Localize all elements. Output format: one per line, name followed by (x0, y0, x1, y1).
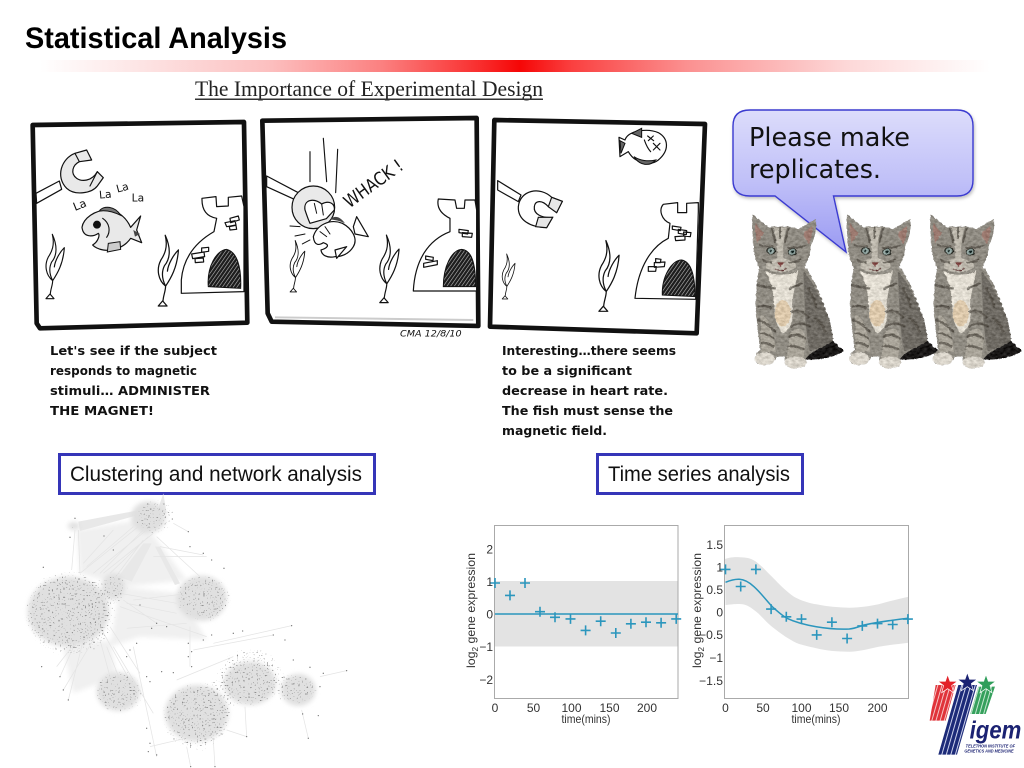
plot 1 y ticks: 2 (486, 542, 493, 556)
squashed fish (290, 217, 368, 258)
plot 1 x ticks: 200 (637, 701, 657, 715)
plot 1 mean line (495, 613, 678, 615)
singing text: La (71, 196, 88, 214)
caption left: THE MAGNET! (50, 403, 154, 418)
caption right: The fish must sense the (502, 403, 673, 418)
plot 1 y ticks: −1 (479, 640, 493, 654)
logo stars (938, 673, 996, 693)
signature: CMA 12/8/10 (400, 330, 462, 340)
fish (82, 207, 142, 252)
plot 1 y ticks (479, 542, 493, 687)
kitten 3 (930, 214, 1022, 368)
logo stripes (930, 685, 995, 755)
singing text: La (115, 180, 130, 196)
plot 1 y axis label: 2 (471, 646, 480, 652)
plot 2 x ticks: 100 (791, 701, 812, 715)
plot 1 y ticks: 0 (486, 608, 493, 622)
red gradient title bar (40, 60, 990, 72)
singing text: La (132, 191, 144, 204)
WHACK text: WHACK ! (340, 156, 408, 213)
outlying network nodes (42, 518, 347, 767)
caption left (50, 343, 217, 418)
seaweed (502, 241, 619, 311)
plot 2 y ticks: −0.5 (699, 628, 723, 642)
speech bubble: Please make replicates (733, 110, 973, 252)
label: clustering and network analysis: Clustering and network analysis (70, 463, 362, 486)
plot 1 y ticks: −2 (479, 673, 493, 687)
kittens (752, 214, 1022, 368)
plot 1 confidence band (495, 581, 678, 646)
network diffuse web (63, 520, 207, 693)
plot 1 y ticks: 1 (486, 575, 493, 589)
plot 2 x ticks: 50 (756, 701, 770, 715)
plot 2 x axis label: time(mins) (792, 712, 841, 726)
speech bubble: Please make replicates: Please make (749, 123, 910, 153)
caption right: to be a significant (502, 363, 632, 378)
plot 1 x ticks: 100 (561, 701, 582, 715)
plot 2 x ticks: 150 (829, 701, 849, 715)
plot 2 x ticks: 200 (867, 701, 888, 715)
plot 2 y ticks: 0.5 (706, 583, 723, 597)
plot 2 y axis label: log (690, 652, 704, 668)
igem logo (930, 673, 1021, 755)
castle (413, 199, 477, 291)
magnet on arm (498, 181, 562, 228)
plot 2 confidence band (725, 557, 909, 652)
plot 2 y ticks: 1 (716, 560, 723, 574)
label: time series analysis: Time series analysis (608, 463, 790, 486)
seaweed (46, 234, 178, 306)
plot 1 x ticks (492, 701, 657, 715)
plot 1 x ticks: 50 (527, 701, 540, 715)
network graph (18, 493, 347, 767)
caption right: Interesting…there seems (502, 343, 676, 358)
plot 2 x ticks: 0 (722, 701, 729, 715)
label: clustering and network analysis (60, 454, 374, 494)
kitten 2 (846, 214, 938, 368)
motion lines (310, 138, 338, 193)
caption left: Let's see if the subject (50, 343, 217, 358)
singing text: La (98, 188, 112, 202)
plot 2 y axis label: 2 (697, 646, 706, 652)
plot 2 y axis label: gene expression (690, 553, 704, 647)
network nodes (speckle) (18, 493, 323, 757)
plot 2 y ticks: −1.5 (699, 674, 723, 688)
kitten 1 (752, 214, 844, 368)
network cluster halos (28, 501, 316, 742)
plot 2 x ticks (722, 701, 888, 715)
singing text (71, 180, 144, 214)
label: time series analysis (598, 454, 802, 494)
time series plot 1: constant model (464, 526, 681, 726)
caption right: decrease in heart rate. (502, 383, 668, 398)
comic panel 1: fish singing under magnet (33, 122, 247, 328)
dead fish (619, 128, 666, 164)
comic heading: The Importance of Experimental Design (195, 76, 543, 101)
seaweed (290, 235, 399, 303)
comic panel 3: dead fish floats (490, 120, 705, 333)
plot 2 y ticks (699, 538, 723, 688)
caption left: stimuli… ADMINISTER (50, 383, 210, 398)
network edges (57, 493, 347, 767)
plot 2 y ticks: 0 (716, 606, 723, 620)
caption left: responds to magnetic (50, 363, 197, 378)
plot 2 frame (724, 526, 908, 698)
plot 1 x ticks: 150 (599, 701, 620, 715)
plot 1 y axis label: log (464, 652, 478, 668)
logo subtitle (964, 744, 1016, 755)
caption right (502, 343, 676, 438)
magnet on arm (267, 176, 335, 229)
plot 1 data points (490, 578, 681, 638)
title: Statistical Analysis (25, 22, 287, 55)
caption right: magnetic field. (502, 423, 607, 438)
time series plot 2: Gaussian process model (690, 526, 913, 726)
speech bubble: Please make replicates: replicates. (749, 155, 881, 185)
plot 2 mean line (726, 579, 908, 629)
plot 2 y ticks: 1.5 (706, 538, 723, 552)
magnet on arm (36, 150, 103, 203)
plot 1 y axis label: gene expression (464, 553, 478, 647)
plot 1 x axis label: time(mins) (562, 712, 611, 726)
plot 2 y ticks: −1 (709, 651, 723, 665)
plot 2 data points (720, 564, 913, 644)
plot 1 x ticks: 0 (492, 701, 499, 715)
plot 1 frame (494, 526, 678, 698)
comic: The Importance of Experimental Design (33, 76, 705, 438)
comic panel 2: magnet whacks fish (262, 118, 478, 340)
castle (635, 203, 698, 299)
castle (181, 196, 244, 293)
